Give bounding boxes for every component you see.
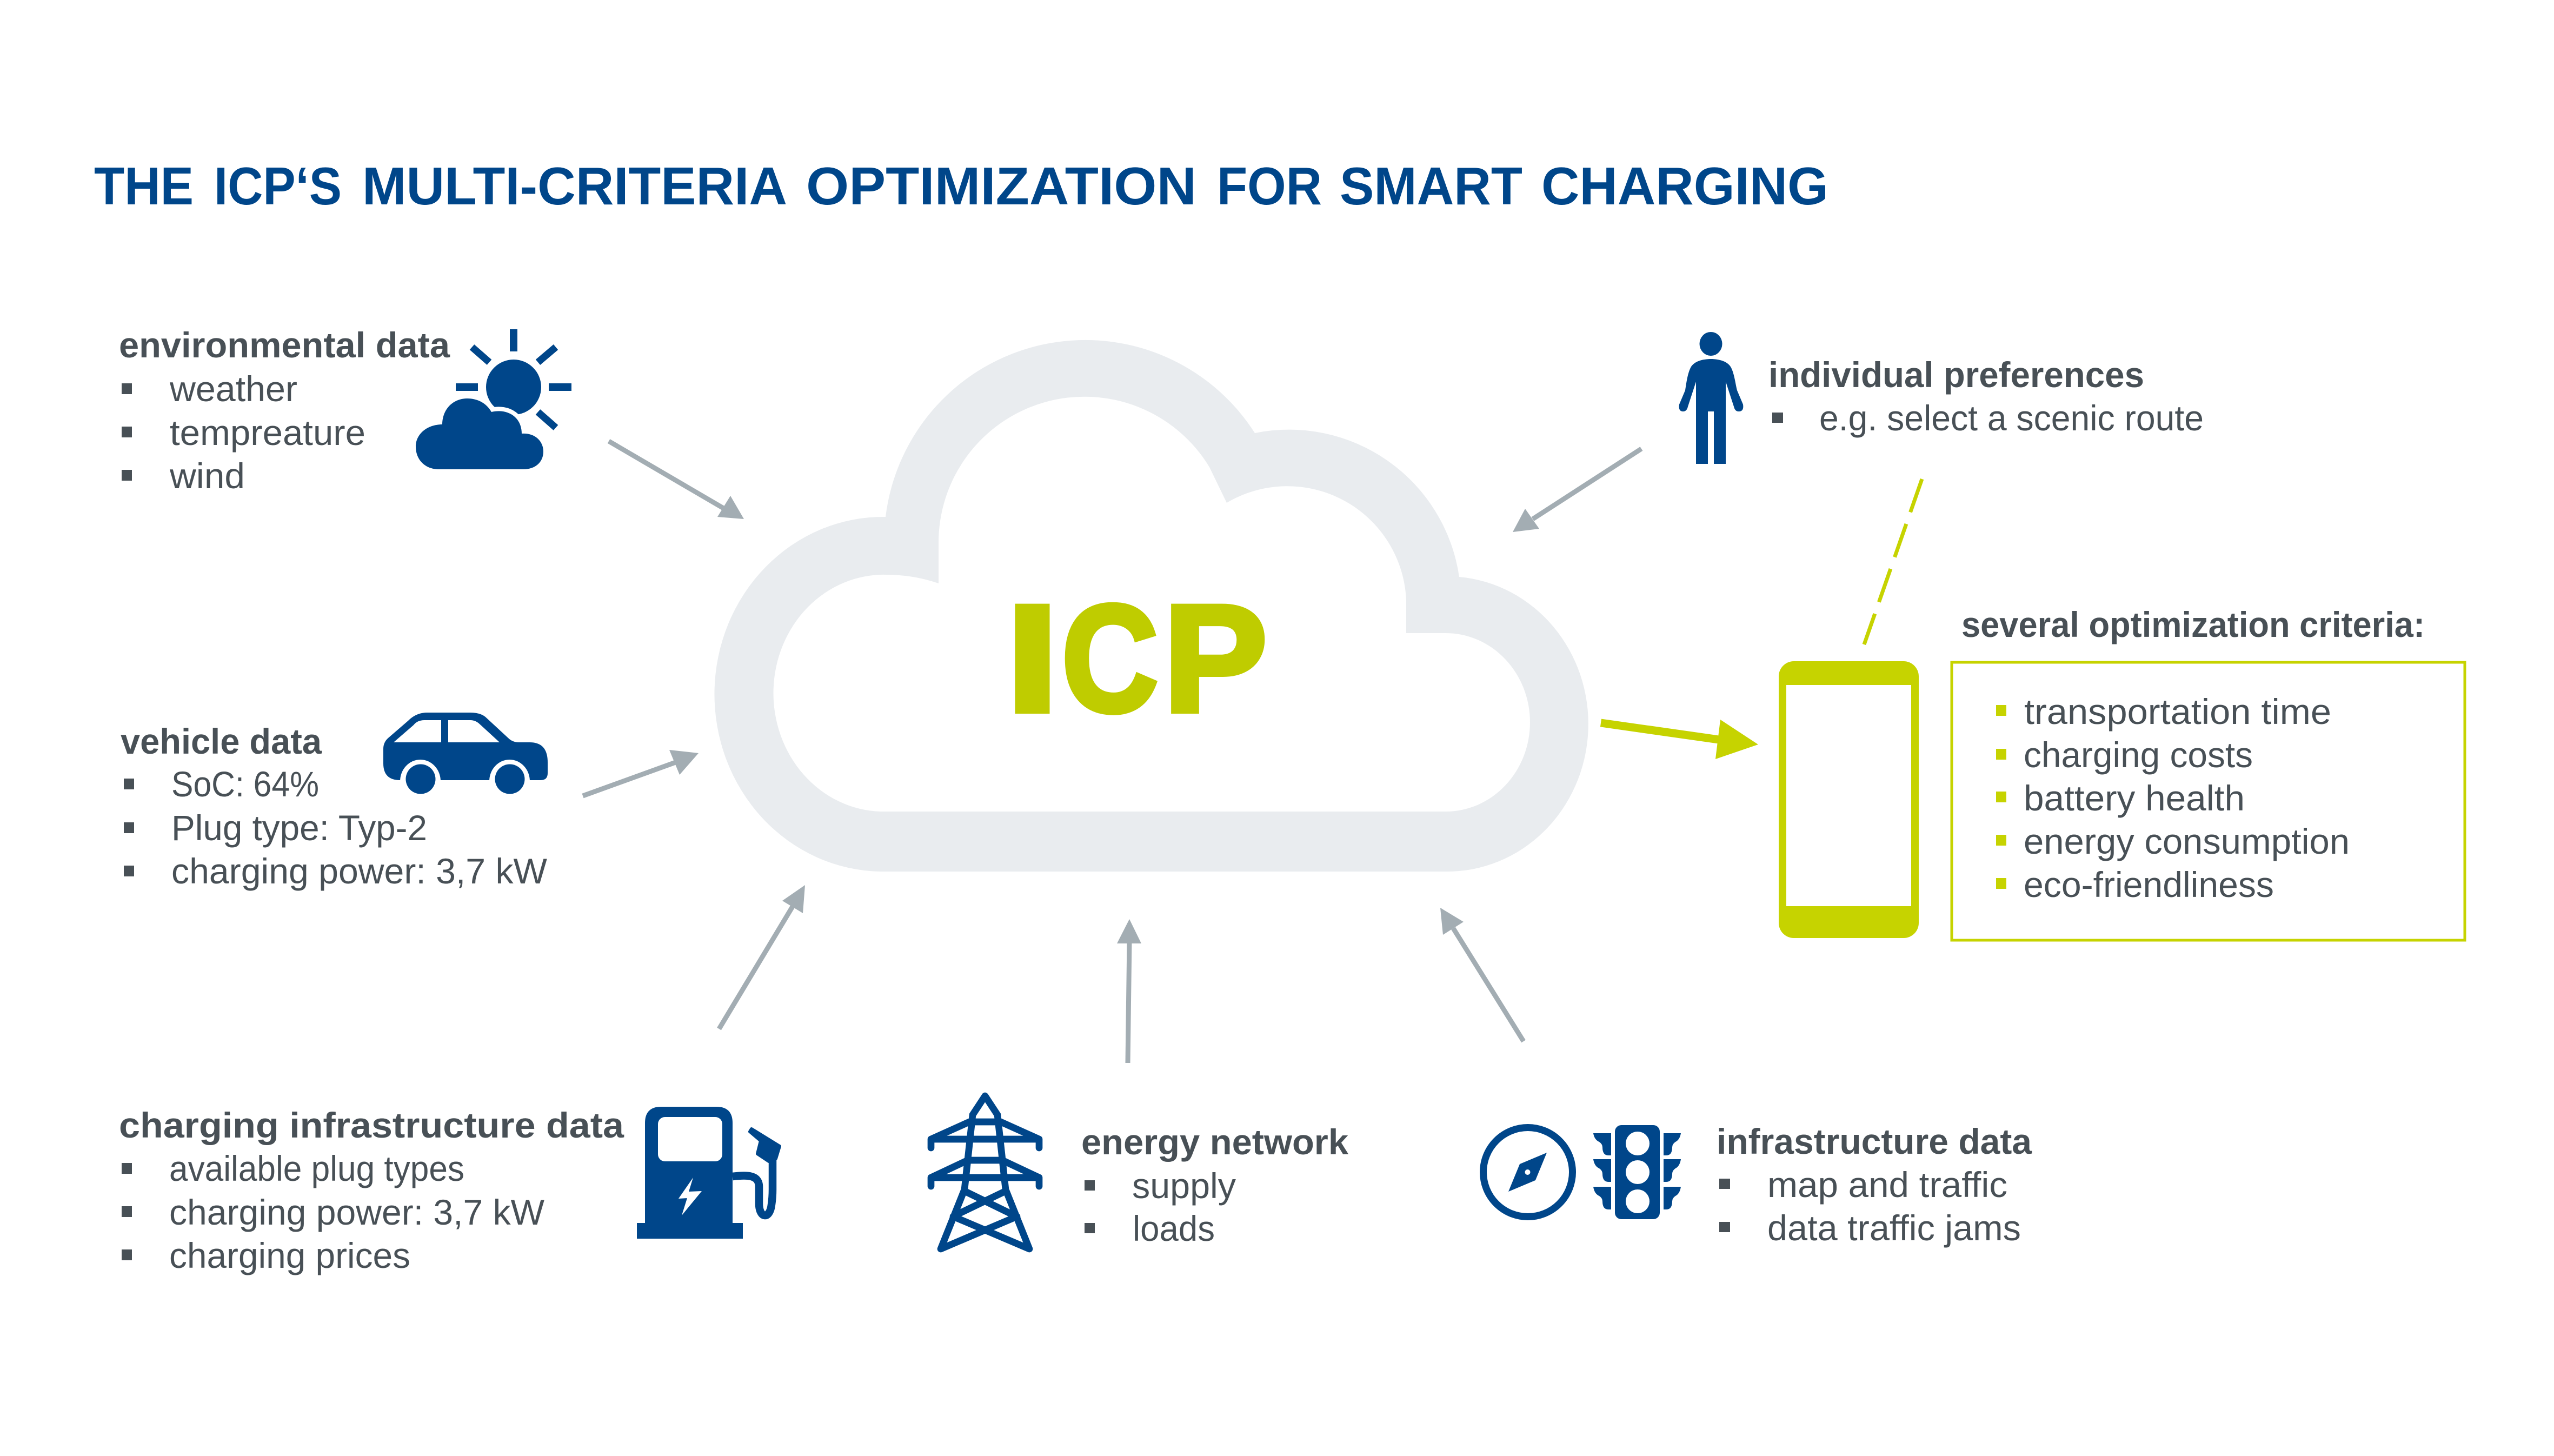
list: map and traffic bbox=[1767, 1165, 2007, 1205]
list: data traffic jams bbox=[1767, 1208, 2021, 1248]
arrow: dashed link from person to phone bbox=[1864, 479, 1922, 644]
criteria list: charging costs bbox=[2024, 735, 2253, 775]
list: charging power: 3,7 kW bbox=[169, 1192, 545, 1232]
list: loads bbox=[1133, 1208, 1215, 1248]
list: weather bbox=[169, 369, 297, 409]
title: ICP‘S bbox=[214, 156, 342, 216]
cloud outline bbox=[714, 340, 1588, 872]
arrow: energy network to cloud bbox=[1117, 919, 1141, 1063]
list bbox=[124, 764, 548, 891]
criteria list: eco-friendliness bbox=[2024, 865, 2274, 905]
list: supply bbox=[1132, 1166, 1236, 1206]
panel: environmental data bbox=[119, 325, 571, 496]
panel: individual preferences bbox=[1679, 332, 2204, 464]
arrow: individual preferences to cloud bbox=[1513, 449, 1641, 532]
title: THE bbox=[94, 156, 194, 216]
arrow: charging infrastructure to cloud bbox=[719, 885, 805, 1029]
ICP label: I bbox=[1006, 574, 1059, 743]
criteria list: transportation time bbox=[2024, 692, 2331, 732]
list: available plug types bbox=[169, 1148, 464, 1188]
icon: smartphone bbox=[1779, 661, 1919, 938]
icon: traffic light bbox=[1593, 1125, 1681, 1219]
list: charging prices bbox=[169, 1235, 410, 1275]
title: FOR bbox=[1217, 156, 1322, 216]
arrow: infrastructure data to cloud bbox=[1440, 908, 1524, 1041]
list bbox=[1085, 1166, 1236, 1248]
panel: ICP cloud bbox=[714, 340, 1588, 872]
panel: energy network bbox=[931, 1096, 1348, 1249]
list: SoC: 64% bbox=[171, 764, 319, 804]
panel: charging infrastructure data bbox=[119, 1105, 780, 1275]
heading: environmental data bbox=[119, 325, 450, 365]
panel: vehicle data bbox=[121, 713, 548, 891]
title: OPTIMIZATION bbox=[806, 156, 1196, 216]
icon: compass bbox=[1484, 1128, 1572, 1216]
criteria list: battery health bbox=[2024, 778, 2245, 818]
title: CHARGING bbox=[1541, 156, 1828, 216]
title: MULTI-CRITERIA bbox=[362, 156, 787, 216]
list bbox=[122, 369, 365, 496]
list: tempreature bbox=[170, 413, 365, 453]
criteria box bbox=[1952, 662, 2465, 940]
criteria list bbox=[1996, 692, 2350, 905]
list bbox=[122, 1148, 545, 1275]
list: Plug type: Typ-2 bbox=[171, 808, 427, 848]
title: SMART bbox=[1340, 156, 1522, 216]
icon: car bbox=[383, 713, 548, 794]
list bbox=[1719, 1165, 2021, 1248]
heading: energy network bbox=[1081, 1122, 1348, 1162]
list: charging power: 3,7 kW bbox=[171, 851, 548, 891]
title bbox=[94, 156, 1828, 216]
ICP label: P bbox=[1163, 574, 1267, 743]
icon: transmission tower bbox=[931, 1096, 1039, 1249]
icon: person bbox=[1679, 332, 1743, 464]
list: wind bbox=[169, 456, 245, 496]
icon: charging pump bbox=[637, 1107, 780, 1239]
arrow: vehicle data to cloud bbox=[583, 750, 699, 796]
panel: optimization criteria bbox=[1952, 604, 2465, 940]
icon: sun and cloud bbox=[416, 329, 571, 469]
heading: individual preferences bbox=[1768, 355, 2144, 395]
heading: vehicle data bbox=[121, 721, 322, 761]
criteria list: energy consumption bbox=[2024, 821, 2350, 861]
ICP label: C bbox=[1062, 574, 1158, 743]
heading: several optimization criteria: bbox=[1961, 604, 2425, 644]
ICP label bbox=[1006, 574, 1267, 743]
heading: infrastructure data bbox=[1717, 1121, 2032, 1161]
arrow: cloud to phone bbox=[1601, 720, 1758, 759]
arrow: environmental data to cloud bbox=[609, 441, 744, 519]
list: e.g. select a scenic route bbox=[1819, 398, 2204, 438]
heading: charging infrastructure data bbox=[119, 1105, 624, 1145]
panel: infrastructure data bbox=[1484, 1121, 2032, 1248]
